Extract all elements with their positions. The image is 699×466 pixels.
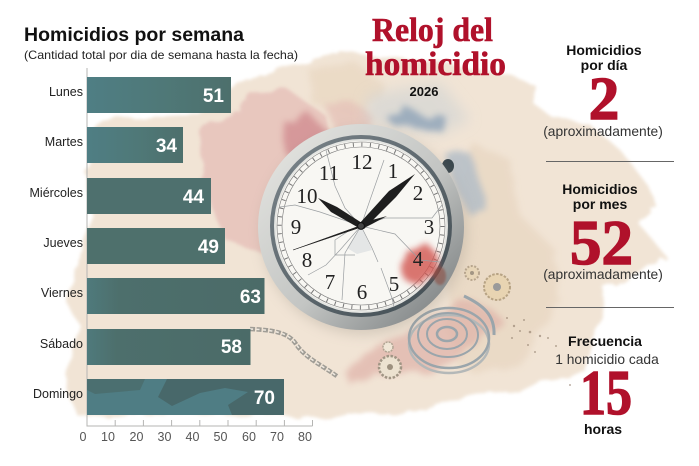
clock numerals: 7 [325,270,335,294]
bar: Domingo: 70 [254,388,275,409]
paint speckles [506,317,571,386]
darker tan wash [445,140,560,372]
stat: homicides per month: Homicidios [562,181,638,197]
stain dark edge [434,267,446,285]
axis numbers: 80 [298,430,312,444]
stat: frequency: 1 homicidio cada [555,352,659,367]
blood stain on dial [402,242,438,285]
bar: Lunes: 51 [203,86,224,107]
stat: homicides per day: 2 [589,66,619,133]
bar: Miércoles: 44 [183,187,204,208]
shaded glass shard [347,226,372,254]
clock numerals: 2 [413,181,423,205]
large gear [484,274,510,300]
bar: Sábado [87,329,250,365]
stat: homicides per month: 52 [570,208,633,278]
stat: homicides per day: Homicidios [566,42,642,58]
pink stain [325,100,372,135]
clock numerals: 1 [388,159,398,183]
stat: frequency: 15 [580,358,632,428]
clock numerals: 10 [296,184,318,208]
clock inner dark ring [270,135,452,317]
title: Reloj del [372,12,493,49]
day labels: Sábado [40,337,83,351]
axis numbers: 0 [80,430,87,444]
axes [87,68,312,426]
title [365,12,506,83]
clock numerals: 4 [413,247,424,271]
bar: Jueves [87,228,225,264]
clock numerals: 6 [357,280,367,304]
clock shadow [262,130,466,334]
clock hands [293,174,415,250]
clock [258,124,466,334]
beige wash [64,52,668,420]
red lower wash [345,298,505,385]
clock numerals: 3 [424,215,434,239]
day labels: Lunes [49,85,83,99]
day labels: Miércoles [30,186,83,200]
day labels: Domingo [33,387,83,401]
stat: homicides per month: (aproximadamente) [543,267,663,282]
bar: Viernes: 63 [240,287,261,308]
spring coil [409,296,494,373]
dark spot near bezel [442,159,454,173]
day labels [30,85,83,401]
minute track [277,142,445,310]
clock numerals: 12 [352,150,372,174]
blue stain right [445,152,488,215]
clock face [276,141,446,311]
pale pink wash [198,90,345,255]
clock inner light ring [274,139,448,313]
clock numerals: 5 [389,272,399,296]
chain highlight [250,329,338,377]
stat: frequency [555,333,659,437]
axis numbers: 20 [130,430,143,444]
bar: Viernes [87,278,264,314]
clock numerals: 11 [319,161,339,185]
axis numbers [80,430,312,444]
stat: homicides per day [543,42,663,139]
bar chart: homicides per weekday [30,68,312,444]
stat: homicides per day: por día [581,57,628,73]
axis numbers: 60 [242,430,256,444]
chain links [250,329,338,377]
bar: Martes [87,127,183,163]
bar: Martes: 34 [156,136,177,157]
stat: homicides per month [543,181,663,282]
small gear [465,266,479,280]
rose stain [284,112,330,170]
clock numerals: 9 [291,215,301,239]
gear tiny [383,342,393,352]
day labels: Jueves [43,236,83,250]
chart subtitle: (Cantidad total por dia de semana hasta la fecha) [24,48,298,62]
year: 2026 [410,84,438,99]
axis numbers: 10 [101,430,115,444]
watercolor background [64,52,668,420]
axis numbers: 40 [186,430,199,444]
bar: Jueves: 49 [198,237,219,258]
stat: frequency: horas [584,421,622,437]
chart heading: Homicidios por semana [24,24,244,46]
divider [546,307,674,308]
day labels: Viernes [41,286,83,300]
tan patch top [308,62,385,118]
clock outer bezel [258,124,464,330]
clock numerals [291,150,434,304]
stat: homicides per day: (aproximadamente) [543,124,663,139]
glass cracks [280,150,442,307]
bar: Lunes [87,77,231,113]
icon: gears and spring [379,266,510,378]
axis numbers: 70 [270,430,284,444]
day labels: Martes [45,135,83,149]
bar: Domingo [87,379,284,415]
stat: frequency: Frecuencia [568,333,642,349]
gear lower [379,356,401,378]
clock numerals: 8 [302,248,312,272]
bar: Sábado: 58 [221,337,242,358]
stat: homicides per month: por mes [573,196,627,212]
axis numbers: 30 [158,430,171,444]
axis numbers: 50 [214,430,227,444]
blue stain top [386,106,444,132]
divider [546,161,674,162]
bar: Miércoles [87,178,211,214]
blue wash top [365,82,470,135]
chain [250,329,338,377]
title: homicidio [365,46,506,83]
